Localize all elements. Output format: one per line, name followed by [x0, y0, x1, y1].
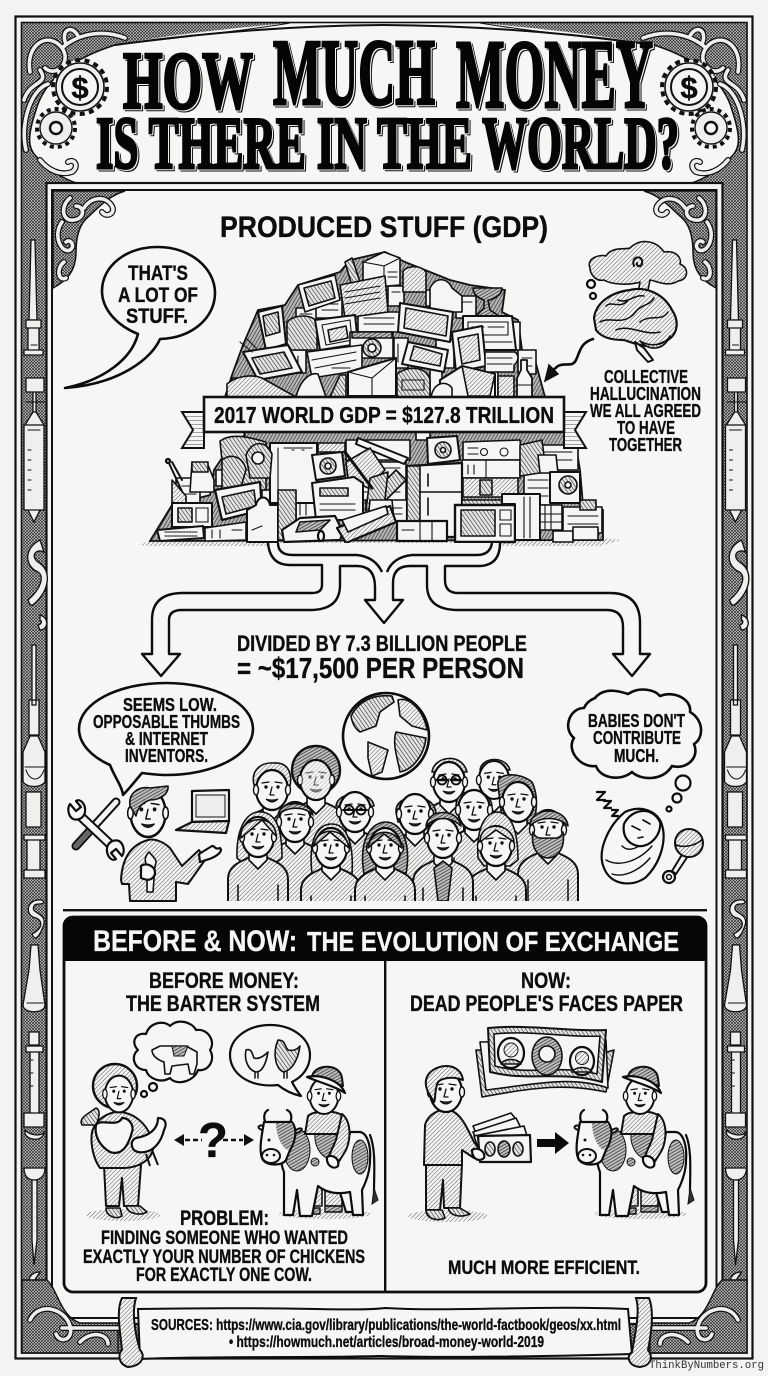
text: source links: SOURCES: https://www.cia.gov/library/publications/the-world-factbook/geos/xx.html — [151, 1317, 621, 1334]
scroll: sources — [119, 1298, 652, 1367]
text: collective hallucination: WE ALL AGREED — [590, 400, 701, 421]
inner panel corner ornaments — [53, 191, 716, 288]
illustration: sleeping baby — [602, 809, 664, 883]
heading: before money: BEFORE MONEY: — [149, 968, 299, 993]
speech bubble: that's a lot of stuff: STUFF. — [126, 305, 188, 328]
divider between columns — [384, 961, 386, 1292]
heading: before and now: THE EVOLUTION OF EXCHANGE — [307, 926, 679, 957]
title — [96, 21, 679, 185]
figure: cow and farmer left — [259, 1067, 378, 1219]
text: problem: FINDING SOMEONE WHO WANTED — [101, 1228, 348, 1249]
speech bubble: seems low: OPPOSABLE THUMBS — [93, 712, 240, 732]
banner: 2017 world gdp: 2017 WORLD GDP = $127.8 TRILLION — [214, 402, 554, 428]
arrow: question between traders — [174, 1114, 254, 1168]
speech bubble: chickens — [230, 1025, 310, 1096]
ground shadow — [138, 538, 622, 546]
text: divided by 7.3 billion people — [237, 631, 527, 685]
thought cloud: babies don't contribute: BABIES DON'T — [588, 711, 685, 731]
arrow: squiggle to pile — [545, 339, 593, 381]
left border tools — [23, 240, 47, 1305]
text: collective hallucination: COLLECTIVE — [604, 366, 688, 387]
illustration: pile of stuff — [150, 252, 603, 543]
watermark: ThinkByNumbers.org — [649, 1360, 764, 1372]
illustration: crowd of people — [227, 744, 579, 901]
title: HOW — [123, 35, 253, 126]
arrows: three way split — [142, 543, 650, 676]
text: collective hallucination: TOGETHER — [609, 434, 682, 455]
thought cloud: babies don't contribute: MUCH. — [614, 746, 659, 766]
speech bubble: seems low: & INTERNET — [125, 729, 208, 749]
icon: large dollar gear left — [53, 60, 107, 114]
speech bubble: seems low — [79, 683, 253, 795]
top corner flourishes — [24, 30, 744, 173]
text: source links — [151, 1317, 621, 1351]
thought cloud: babies don't contribute: CONTRIBUTE — [593, 728, 681, 748]
icon: crossed tools — [68, 800, 124, 860]
heading: before and now — [93, 925, 679, 958]
text: problem — [83, 1207, 365, 1286]
icon: small gear left — [37, 109, 75, 147]
speech bubble: that's a lot of stuff: THAT'S — [128, 262, 188, 285]
right border tools — [724, 240, 749, 1305]
text: problem: PROBLEM: — [180, 1207, 269, 1230]
heading: before money: THE BARTER SYSTEM — [126, 991, 320, 1016]
panel: before and now — [63, 917, 707, 1292]
text: much more efficient: MUCH MORE EFFICIENT. — [448, 1257, 640, 1279]
text: divided by 7.3 billion people: DIVIDED BY 7.3 BILLION PEOPLE — [237, 631, 527, 656]
icon: globe — [343, 693, 429, 779]
heading: now — [410, 968, 683, 1016]
thought cloud: cow — [134, 1022, 212, 1097]
person: front row — [227, 800, 579, 901]
inner panel — [46, 183, 722, 1324]
icon: large dollar gear right: $ — [680, 70, 698, 105]
icon: large dollar gear left: $ — [71, 70, 89, 105]
speech bubble: that's a lot of stuff: A LOT OF — [118, 284, 198, 307]
figure: man paying with money — [408, 1066, 488, 1222]
panel header: black bar — [63, 917, 707, 961]
text: problem: FOR EXACTLY ONE COW. — [136, 1265, 312, 1286]
speech bubble: that's a lot of stuff — [65, 247, 215, 388]
person: back row — [242, 744, 538, 874]
text: collective hallucination: TO HAVE — [617, 417, 675, 438]
figure: inventor man — [121, 786, 221, 901]
figure: barter man with chickens — [81, 1064, 166, 1221]
icon: fan of cash in hand — [472, 1113, 531, 1162]
heading: produced stuff: PRODUCED STUFF (GDP) — [220, 211, 548, 244]
heading: now: NOW: — [521, 968, 571, 993]
illustration: banknotes with faces — [476, 1027, 614, 1097]
text: problem: EXACTLY YOUR NUMBER OF CHICKENS — [83, 1247, 365, 1268]
person: middle row — [335, 788, 494, 879]
divider line — [63, 909, 707, 911]
text: divided by 7.3 billion people: = ~$17,500 PER PERSON — [237, 653, 524, 685]
thought cloud: babies don't contribute — [568, 690, 701, 812]
title: MUCH — [273, 21, 435, 125]
icon: small gear right — [692, 109, 730, 147]
text: source links: • https://howmuch.net/articles/broad-money-world-2019 — [229, 1334, 544, 1351]
icon: large dollar gear right — [662, 60, 716, 114]
text: collective hallucination — [590, 366, 701, 455]
heading: before and now: BEFORE & NOW: — [93, 925, 297, 958]
icon: brain with cloud — [587, 242, 687, 362]
speech bubble: seems low: INVENTORS. — [125, 746, 208, 766]
icon: rattle — [663, 829, 703, 883]
bottom frame corners — [22, 1280, 747, 1353]
text: zzz — [597, 792, 618, 816]
heading: before money — [126, 968, 320, 1016]
speech bubble: seems low: SEEMS LOW. — [123, 695, 217, 715]
heading: now: DEAD PEOPLE'S FACES PAPER — [410, 991, 683, 1016]
banner: 2017 world gdp — [182, 397, 586, 448]
arrow: question between traders: ? — [198, 1114, 228, 1168]
text: collective hallucination: HALLUCINATION — [590, 383, 701, 404]
icon: laptop — [176, 790, 229, 833]
arrow: money to cow — [537, 1132, 569, 1154]
figure: cow and farmer right — [575, 1067, 694, 1219]
